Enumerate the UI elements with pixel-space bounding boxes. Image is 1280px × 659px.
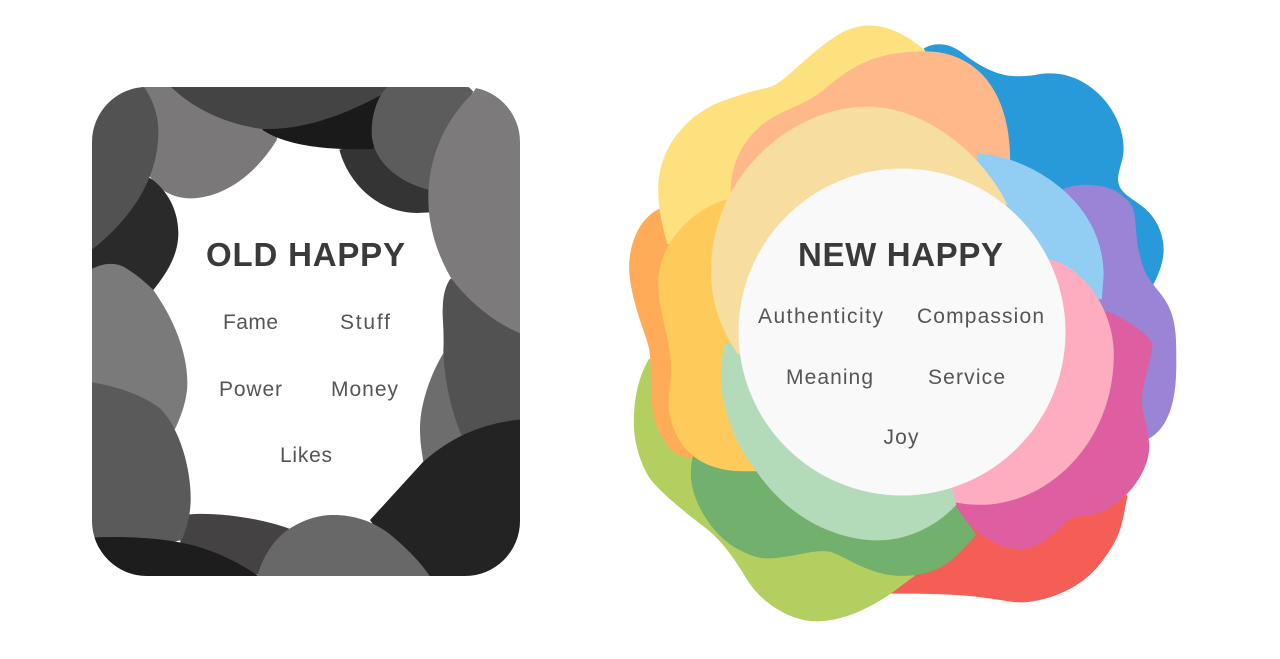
text: joy: Joy xyxy=(884,426,919,449)
text: stuff: Stuff xyxy=(340,311,390,334)
grey blob frame xyxy=(87,82,527,582)
heading: old happy: OLD HAPPY xyxy=(206,236,405,273)
centre circle xyxy=(738,168,1066,496)
text: fame: Fame xyxy=(223,311,278,334)
text: compassion: Compassion xyxy=(917,305,1044,328)
colour blob flower xyxy=(629,26,1176,621)
text: authenticity: Authenticity xyxy=(758,305,884,328)
text: service: Service xyxy=(928,366,1005,389)
panel: new happy xyxy=(629,26,1176,621)
text: likes: Likes xyxy=(280,444,332,467)
text: power: Power xyxy=(219,378,282,401)
heading: new happy: NEW HAPPY xyxy=(798,236,1003,273)
panel: old happy xyxy=(87,82,527,582)
text: meaning: Meaning xyxy=(786,366,873,389)
text: money: Money xyxy=(331,378,398,401)
